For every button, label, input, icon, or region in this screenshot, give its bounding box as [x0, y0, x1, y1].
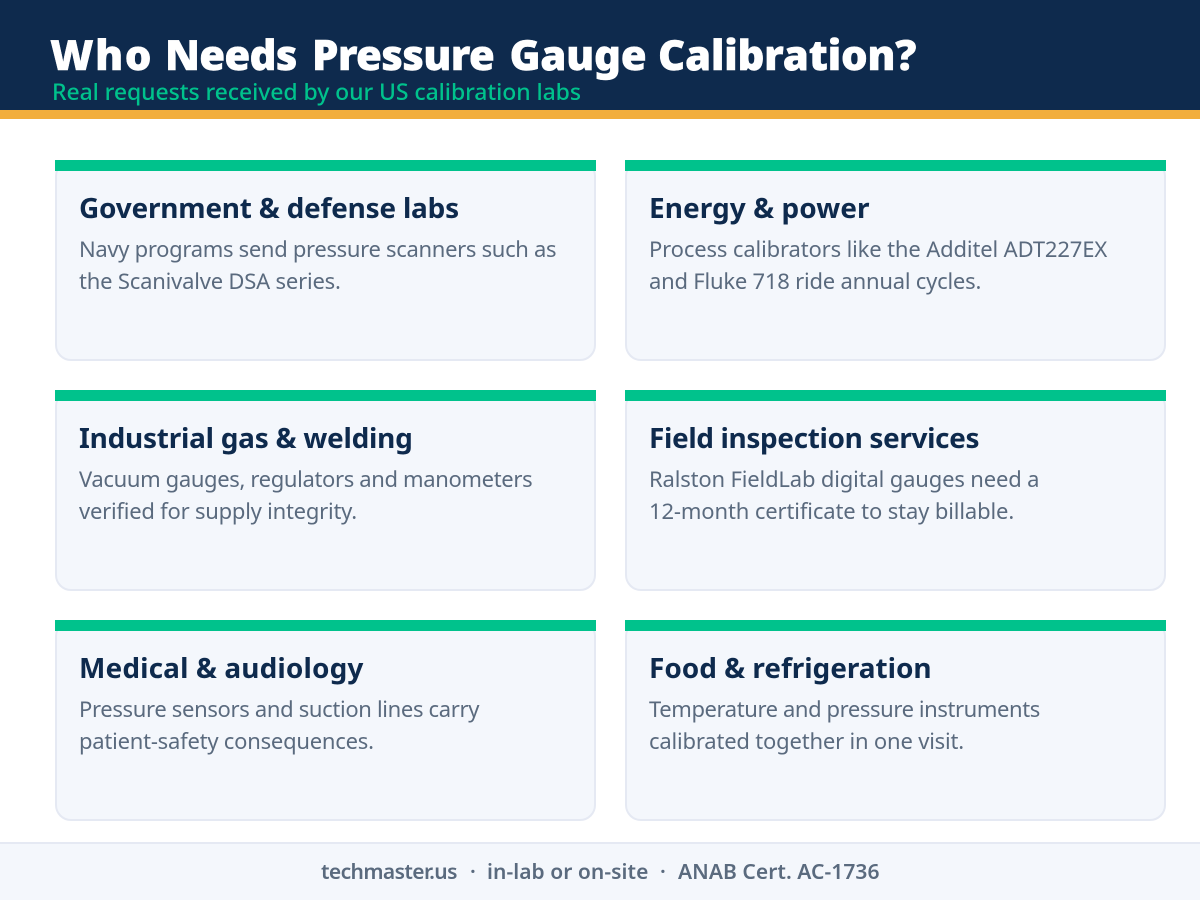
title: Pressure: [312, 26, 494, 83]
description: [649, 234, 1108, 296]
description: Pressure sensors and suction lines carry: [79, 694, 479, 724]
title: Calibration?: [658, 26, 916, 83]
description: [79, 694, 480, 756]
footer band: [0, 842, 1200, 900]
heading: Medical & audiology: [79, 649, 363, 687]
title: Needs: [165, 26, 297, 83]
panel: industrial gas and welding: [55, 390, 596, 591]
footer band: ·: [470, 858, 476, 886]
description: Vacuum gauges, regulators and manometers: [79, 464, 532, 494]
subtitle: Real requests received by our US calibration labs: [52, 75, 581, 107]
title: Gauge: [510, 26, 646, 83]
description: Temperature and pressure instruments: [649, 694, 1040, 724]
description: verified for supply integrity.: [79, 496, 357, 526]
heading: Government & defense labs: [79, 189, 459, 227]
description: [79, 464, 532, 526]
description: patient-safety consequences.: [79, 726, 374, 756]
description: [649, 464, 1039, 526]
heading: Food & refrigeration: [649, 649, 932, 687]
title: Who: [50, 26, 153, 83]
panel: government and defense labs: [55, 160, 596, 361]
panel: field inspection services: [625, 390, 1166, 591]
description: [649, 694, 1040, 756]
title: [50, 26, 916, 83]
heading: Industrial gas & welding: [79, 419, 413, 457]
heading: Field inspection services: [649, 419, 979, 457]
header band: [0, 0, 1200, 119]
description: Ralston FieldLab digital gauges need a: [649, 464, 1039, 494]
description: [79, 234, 556, 296]
footer band: ANAB Cert. AC-1736: [678, 858, 880, 886]
footer band: in-lab or on-site: [487, 858, 648, 886]
description: Process calibrators like the Additel ADT227EX: [649, 234, 1107, 264]
description: 12-month certificate to stay billable.: [649, 496, 1014, 526]
panel: energy and power: [625, 160, 1166, 361]
footer band: ·: [660, 858, 666, 886]
description: Navy programs send pressure scanners such as: [79, 234, 556, 264]
panel: food and refrigeration: [625, 620, 1166, 821]
panel: medical and audiology: [55, 620, 596, 821]
description: calibrated together in one visit.: [649, 726, 964, 756]
description: and Fluke 718 ride annual cycles.: [649, 266, 981, 296]
footer band: techmaster.us: [321, 858, 457, 886]
description: the Scanivalve DSA series.: [79, 266, 341, 296]
heading: Energy & power: [649, 189, 870, 227]
